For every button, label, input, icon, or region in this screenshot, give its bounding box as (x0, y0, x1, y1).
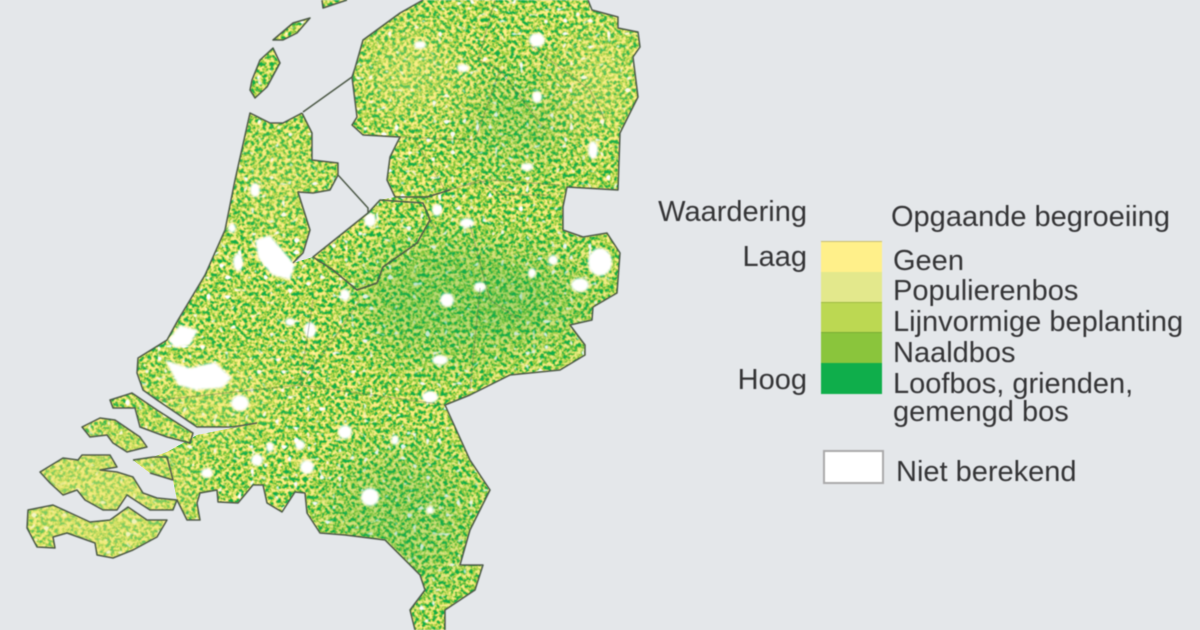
legend label: Lijnvormige beplanting: Lijnvormige beplanting (893, 306, 1183, 338)
map: Netherlands vegetation valuation (26, 0, 642, 630)
legend heading: Opgaande begroeiing: Opgaande begroeiing (891, 201, 1170, 233)
borders: coast and province lines (27, 0, 640, 630)
legend label: Populierenbos: Populierenbos (893, 275, 1078, 307)
colour swatches (820, 240, 883, 395)
legend heading: Waardering: Waardering (658, 196, 807, 228)
legend label: Loofbos, grienden, gemengd bos: Loofbos, grienden, (893, 368, 1133, 400)
legend label: Niet berekend: Niet berekend (896, 456, 1077, 488)
scale label: Hoog: Hoog (738, 364, 807, 396)
white patches: not calculated (165, 33, 612, 514)
legend label: Loofbos, grienden, gemengd bos (893, 368, 1133, 428)
legend label: Naaldbos: Naaldbos (893, 337, 1016, 369)
scale label: Laag: Laag (742, 241, 807, 273)
legend label: Geen: Geen (893, 245, 964, 277)
land cover texture (27, 0, 640, 630)
swatch: niet berekend (823, 450, 884, 484)
legend label: Loofbos, grienden, gemengd bos: gemengd bos (893, 396, 1069, 428)
